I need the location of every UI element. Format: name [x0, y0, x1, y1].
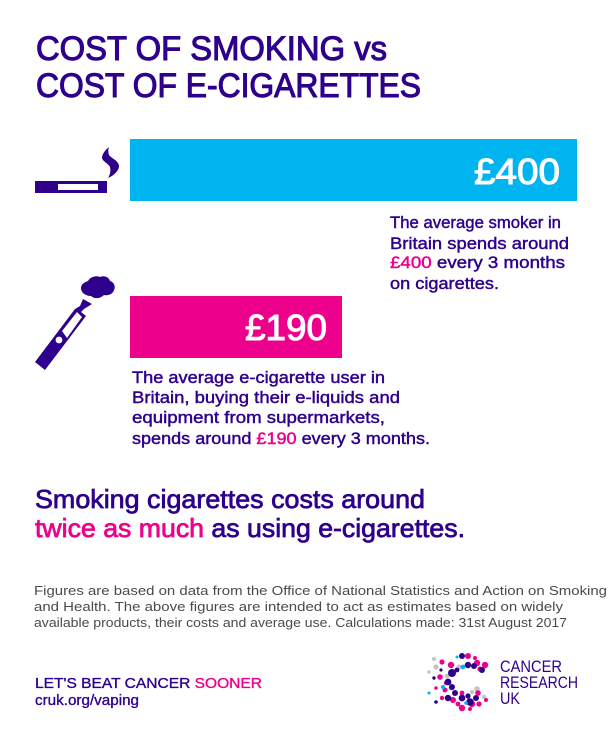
- statement: [35, 484, 465, 543]
- logo: Cancer Research UK: [427, 653, 578, 711]
- logo dots: [427, 653, 488, 711]
- text: e-cigarette user spend: spends around £190 every 3 months.: [132, 429, 430, 448]
- footnote: and Health. The above figures are intended to act as estimates based on widely: [34, 599, 564, 614]
- text: e-cigarette user spend: [132, 368, 430, 448]
- call to action: [35, 675, 262, 709]
- logo: Cancer Research UK: CANCER: [500, 657, 562, 676]
- logo: Cancer Research UK: RESEARCH: [500, 673, 578, 692]
- footnote: Figures are based on data from the Office of National Statistics and Action on Smoking: [34, 583, 607, 598]
- call to action: LET'S BEAT CANCER SOONER: [35, 675, 262, 692]
- text: e-cigarette user spend: equipment from supermarkets,: [132, 408, 385, 427]
- text: smoker spend: [390, 213, 569, 293]
- text: smoker spend: Britain spends around: [390, 234, 569, 253]
- footnote: [34, 583, 607, 630]
- icon: e-cigarette: [35, 276, 115, 370]
- text: e-cigarette user spend: Britain, buying their e-liquids and: [132, 388, 400, 407]
- statement: Smoking cigarettes costs around: [35, 484, 425, 514]
- title: COST OF E-CIGARETTES: [36, 67, 421, 105]
- logo: Cancer Research UK: UK: [500, 689, 521, 708]
- bar: cigarettes cost: £400: [474, 151, 560, 192]
- text: e-cigarette user spend: The average e-cigarette user in: [132, 368, 385, 387]
- bar: cigarettes cost: [130, 139, 577, 201]
- text: smoker spend: on cigarettes.: [390, 274, 499, 293]
- statement: twice as much as using e-cigarettes.: [35, 513, 465, 543]
- bar: e-cigarettes cost: [130, 296, 342, 358]
- icon: cigarette: [35, 147, 119, 193]
- footnote: available products, their costs and average use. Calculations made: 31st August 2017: [34, 615, 567, 630]
- call to action: cruk.org/vaping: [35, 692, 139, 709]
- title: [36, 30, 421, 105]
- bar: e-cigarettes cost: £190: [245, 307, 327, 348]
- title: COST OF SMOKING vs: [36, 30, 387, 68]
- text: smoker spend: The average smoker in: [390, 213, 561, 232]
- text: smoker spend: £400 every 3 months: [390, 253, 565, 272]
